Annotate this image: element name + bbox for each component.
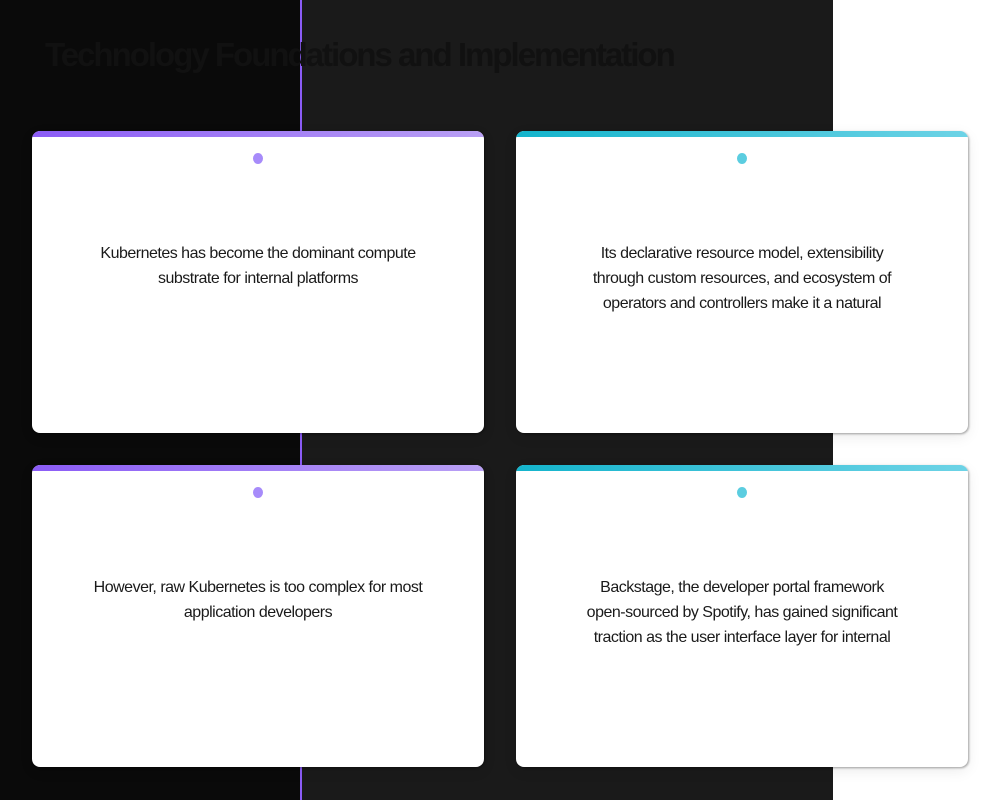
icon: dot — [253, 153, 263, 164]
text block: Backstage, the developer portal framework — [600, 579, 884, 596]
title: Technology Foundations and Implementation — [45, 36, 674, 73]
panel: card 1 — [32, 131, 484, 433]
panel: card 4 — [516, 465, 968, 767]
text block: substrate for internal platforms — [158, 270, 358, 287]
panel: card 2 — [516, 131, 968, 433]
text block: Kubernetes has become the dominant compute — [100, 245, 416, 262]
text block — [94, 579, 423, 621]
text block — [587, 579, 898, 646]
text block: operators and controllers make it a natural — [603, 295, 881, 312]
icon: dot — [737, 153, 747, 164]
text block — [593, 245, 892, 312]
text block: However, raw Kubernetes is too complex for most — [94, 579, 422, 596]
icon: dot — [737, 487, 747, 498]
text block: traction as the user interface layer for internal — [594, 629, 890, 646]
text block: Its declarative resource model, extensibility — [601, 245, 883, 262]
text block: application developers — [184, 604, 332, 621]
text block: through custom resources, and ecosystem of — [593, 270, 891, 287]
text block: open-sourced by Spotify, has gained significant — [587, 604, 897, 621]
panel: card 3 — [32, 465, 484, 767]
icon: dot — [253, 487, 263, 498]
text block — [100, 245, 416, 287]
